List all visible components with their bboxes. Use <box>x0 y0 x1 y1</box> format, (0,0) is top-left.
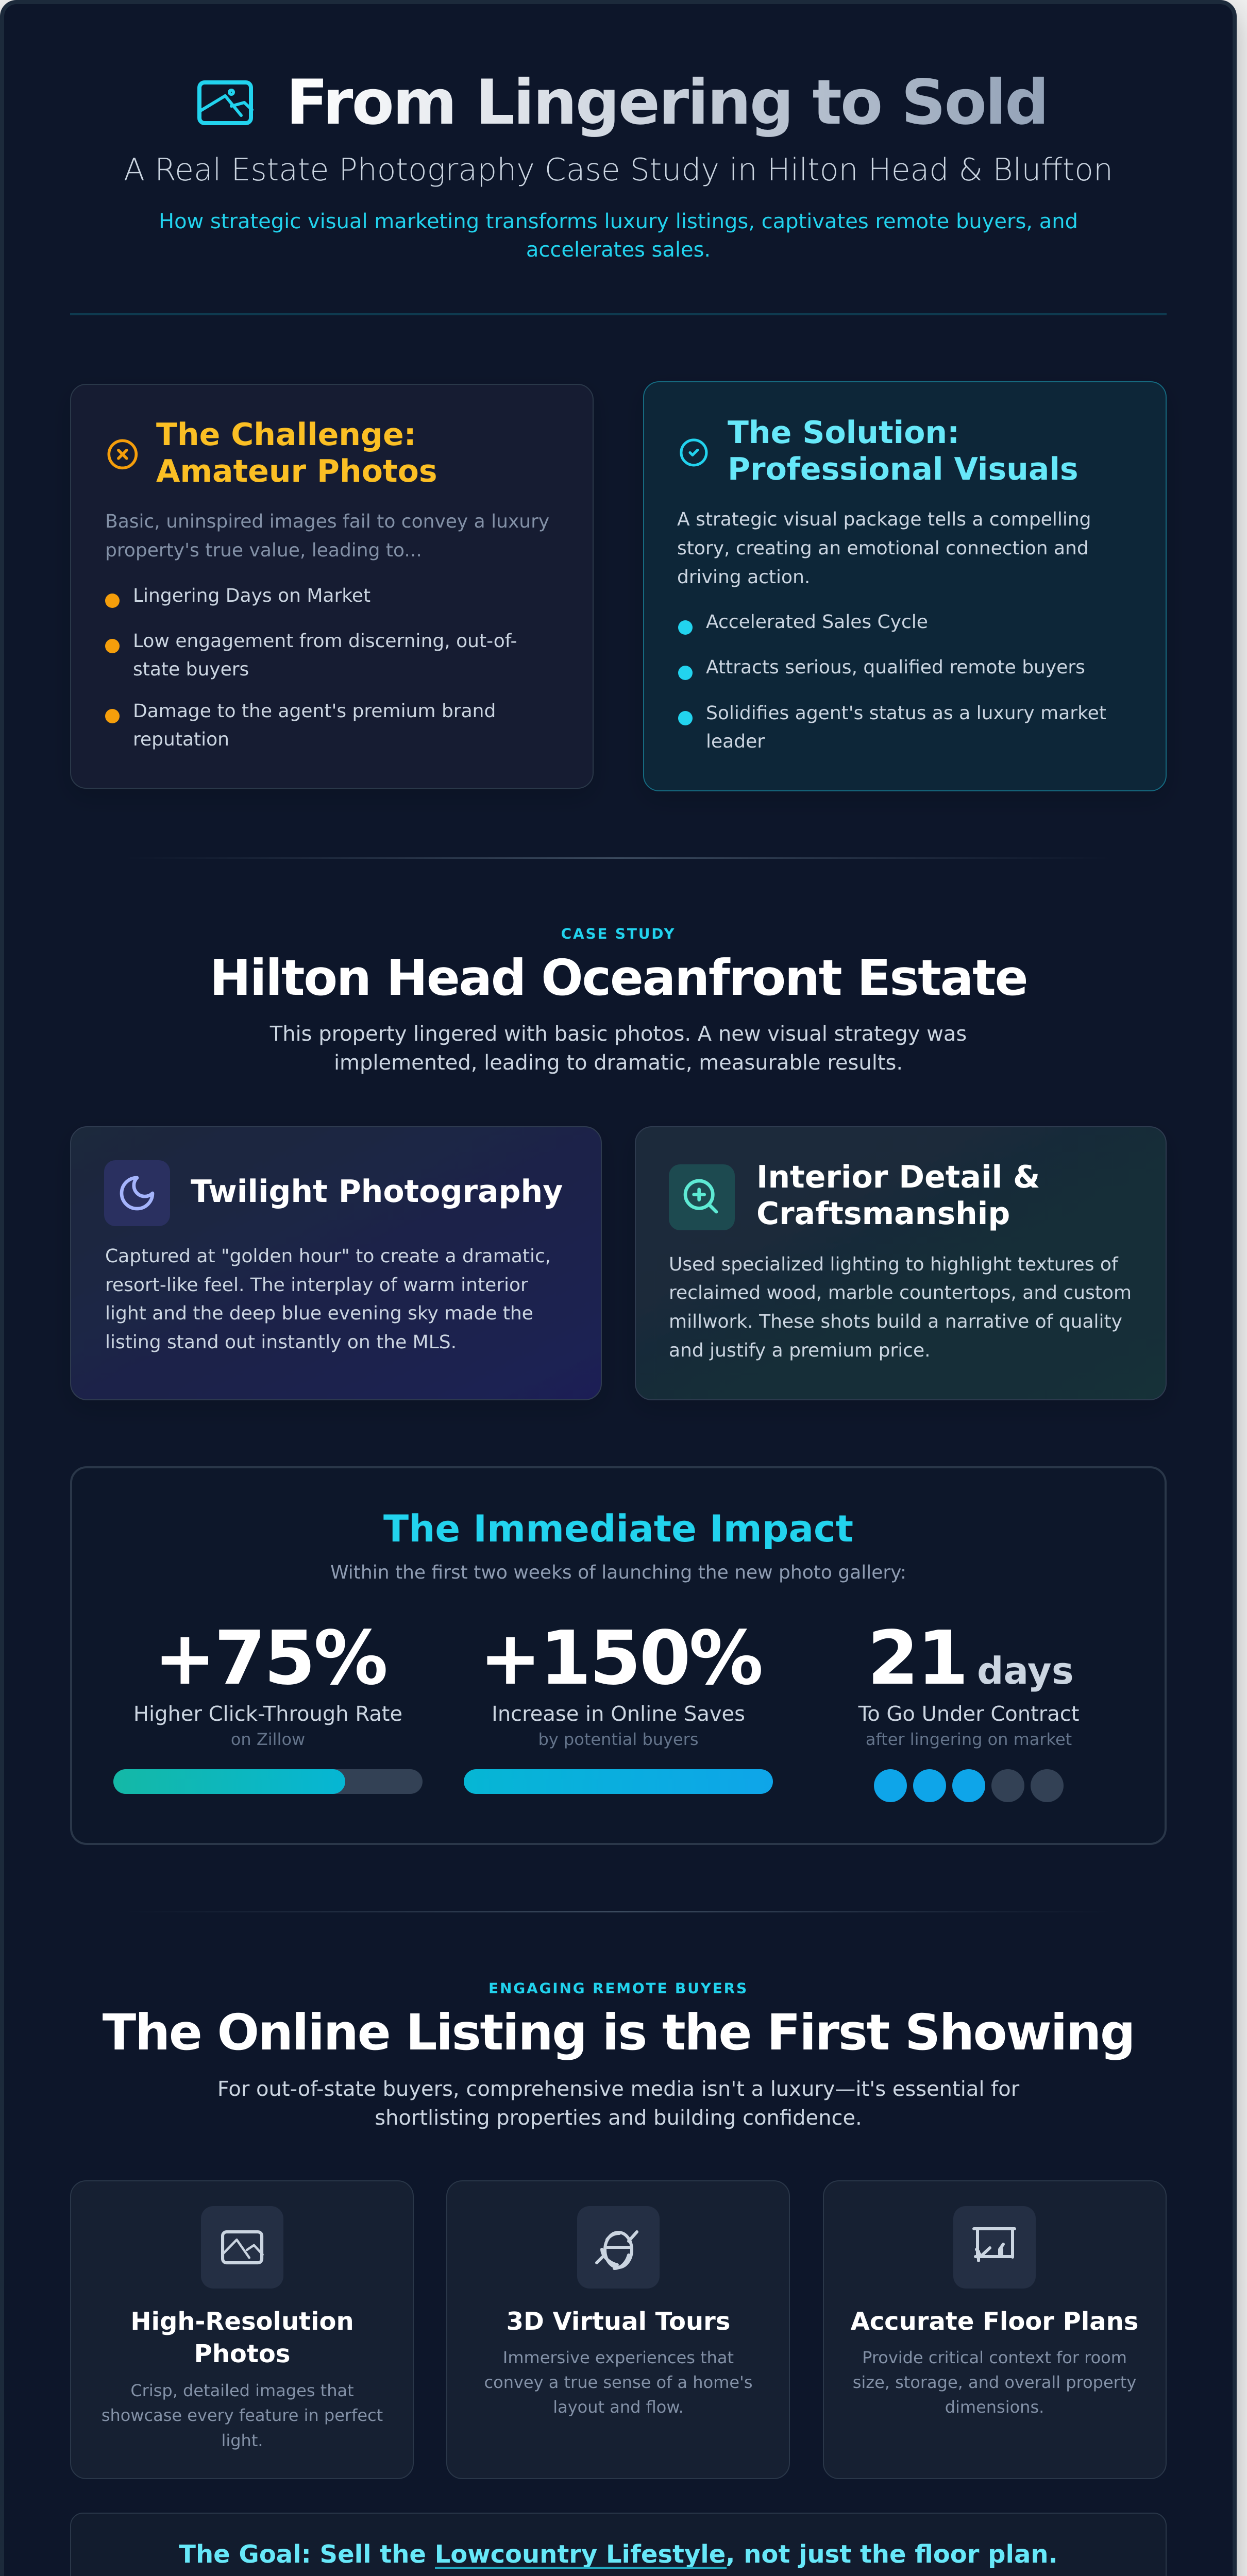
stat: days: To Go Under Contract <box>858 1702 1079 1726</box>
section heading: case study: implemented, leading to dramatic, measurable results. <box>334 1051 903 1075</box>
challenge list: Damage to the agent's premium brand <box>133 701 496 722</box>
challenge list <box>133 585 517 750</box>
challenge heading: The Challenge: <box>156 417 416 453</box>
icon: check circle <box>681 440 706 465</box>
icon: floor plan <box>953 2206 1036 2289</box>
solution heading: The Solution: <box>728 415 959 451</box>
stat: click-through <box>113 1615 423 1794</box>
solution heading <box>728 415 1079 487</box>
stat: saves <box>464 1615 773 1794</box>
challenge heading: Amateur Photos <box>156 453 437 489</box>
challenge bullets <box>105 594 120 723</box>
card: accurate floor plans: size, storage, and overall property <box>853 2372 1136 2392</box>
header <box>124 67 1113 262</box>
title: From Lingering to Sold <box>286 67 1048 139</box>
subtitle: A Real Estate Photography Case Study in Hilton Head & Bluffton <box>124 152 1113 188</box>
solution intro <box>677 509 1091 588</box>
section heading: case study: CASE STUDY <box>561 925 676 942</box>
twilight text: listing stand out instantly on the MLS. <box>105 1332 457 1353</box>
section heading: remote buyers <box>103 1980 1134 2130</box>
interior text <box>669 1254 1132 1361</box>
solution list: Accelerated Sales Cycle <box>706 612 928 633</box>
card: 3d virtual tours: convey a true sense of a home's <box>484 2372 752 2392</box>
card: 3d virtual tours: Immersive experiences that <box>503 2348 734 2367</box>
challenge list: Low engagement from discerning, out-of- <box>133 631 517 652</box>
interior heading <box>756 1159 1040 1232</box>
callout: the goal: The Goal: Sell the Lowcountry Lifestyle, not just the floor plan. <box>179 2540 1058 2569</box>
card: accurate floor plans <box>823 2181 1166 2479</box>
interior text: millwork. These shots build a narrative of quality <box>669 1311 1122 1332</box>
solution bullets <box>678 620 693 725</box>
stat: days: days <box>977 1649 1074 1692</box>
icon: zoom in <box>669 1164 735 1230</box>
solution intro: driving action. <box>677 567 810 588</box>
solution list: leader <box>706 731 765 752</box>
twilight text <box>105 1246 551 1353</box>
interior heading: Craftsmanship <box>756 1196 1010 1232</box>
progress bar 150% <box>464 1769 773 1794</box>
progress bar 75% <box>113 1769 423 1794</box>
challenge intro: property's true value, leading to... <box>105 540 422 561</box>
card: accurate floor plans: Accurate Floor Plans <box>851 2307 1138 2336</box>
card: high-resolution photos: light. <box>221 2431 263 2450</box>
dots <box>874 1769 1064 1802</box>
impact subheading: Within the first two weeks of launching the new photo gallery: <box>330 1562 906 1583</box>
solution list: Attracts serious, qualified remote buyers <box>706 657 1085 678</box>
interior text: and justify a premium price. <box>669 1340 931 1361</box>
stat: saves: by potential buyers <box>538 1730 698 1749</box>
twilight text: Captured at "golden hour" to create a dramatic, <box>105 1246 551 1267</box>
card: high-resolution photos: Photos <box>194 2340 290 2368</box>
callout: the goal <box>71 2513 1166 2576</box>
panel: challenge <box>71 384 593 788</box>
section heading: remote buyers: shortlisting properties and building confidence. <box>375 2106 862 2130</box>
card: 3d virtual tours <box>447 2181 789 2479</box>
solution heading: Professional Visuals <box>728 451 1079 487</box>
interior text: Used specialized lighting to highlight textures of <box>669 1254 1119 1275</box>
icon: image <box>201 2206 283 2289</box>
stat: saves: Increase in Online Saves <box>492 1702 745 1726</box>
challenge list: reputation <box>133 729 229 750</box>
solution intro: story, creating an emotional connection and <box>677 538 1089 559</box>
card: high-resolution photos: showcase every feature in perfect <box>102 2405 383 2425</box>
tagline: How strategic visual marketing transforms luxury listings, captivates remote buyers, and <box>159 210 1078 233</box>
stat: days <box>858 1615 1079 1802</box>
solution list: Solidifies agent's status as a luxury market <box>706 703 1106 724</box>
card: accurate floor plans: dimensions. <box>945 2397 1044 2417</box>
solution intro: A strategic visual package tells a compelling <box>677 509 1091 530</box>
stat: click-through: Higher Click-Through Rate <box>133 1702 402 1726</box>
section heading: case study: Hilton Head Oceanfront Estate <box>210 949 1027 1007</box>
challenge intro: Basic, uninspired images fail to convey a luxury <box>105 511 549 532</box>
section heading: case study: This property lingered with basic photos. A new visual strategy was <box>269 1022 967 1046</box>
icon: globe <box>577 2206 660 2289</box>
stat: click-through: +75% <box>154 1615 386 1701</box>
section heading: remote buyers: The Online Listing is the First Showing <box>103 2004 1134 2061</box>
tagline <box>159 210 1078 262</box>
solution list <box>706 612 1106 752</box>
challenge heading <box>156 417 437 489</box>
icon: x circle <box>109 440 136 468</box>
section heading: remote buyers: ENGAGING REMOTE BUYERS <box>488 1980 748 1997</box>
stat: days: after lingering on market <box>866 1730 1072 1749</box>
panel: interior detail <box>635 1127 1166 1400</box>
stat: click-through: on Zillow <box>231 1730 305 1749</box>
panel: solution <box>644 382 1166 791</box>
twilight text: light and the deep blue evening sky made the <box>105 1303 533 1324</box>
interior text: reclaimed wood, marble countertops, and custom <box>669 1282 1132 1303</box>
section heading: remote buyers: For out-of-state buyers, comprehensive media isn't a luxury—it's essential for <box>217 2077 1020 2101</box>
stat: days: 21 <box>867 1615 967 1701</box>
tagline: accelerates sales. <box>526 238 711 262</box>
section heading: case study <box>210 925 1027 1075</box>
twilight text: resort-like feel. The interplay of warm interior <box>105 1275 528 1296</box>
panel: twilight photography <box>71 1127 601 1400</box>
panel: immediate impact <box>71 1467 1166 1844</box>
card: high-resolution photos: High-Resolution <box>130 2307 354 2336</box>
challenge list: state buyers <box>133 659 249 680</box>
card: high-resolution photos <box>71 2181 413 2479</box>
interior heading: Interior Detail & <box>756 1159 1040 1195</box>
twilight heading: Twilight Photography <box>191 1174 563 1210</box>
card: 3d virtual tours: layout and flow. <box>553 2397 684 2417</box>
stat: saves: +150% <box>479 1615 762 1701</box>
icon: moon <box>104 1160 170 1226</box>
challenge intro <box>105 511 549 561</box>
challenge list: Lingering Days on Market <box>133 585 370 606</box>
impact heading: The Immediate Impact <box>383 1507 853 1550</box>
card: high-resolution photos: Crisp, detailed images that <box>130 2381 354 2400</box>
card: 3d virtual tours: 3D Virtual Tours <box>507 2307 730 2336</box>
icon: image <box>199 82 252 123</box>
card: accurate floor plans: Provide critical context for room <box>862 2348 1127 2367</box>
